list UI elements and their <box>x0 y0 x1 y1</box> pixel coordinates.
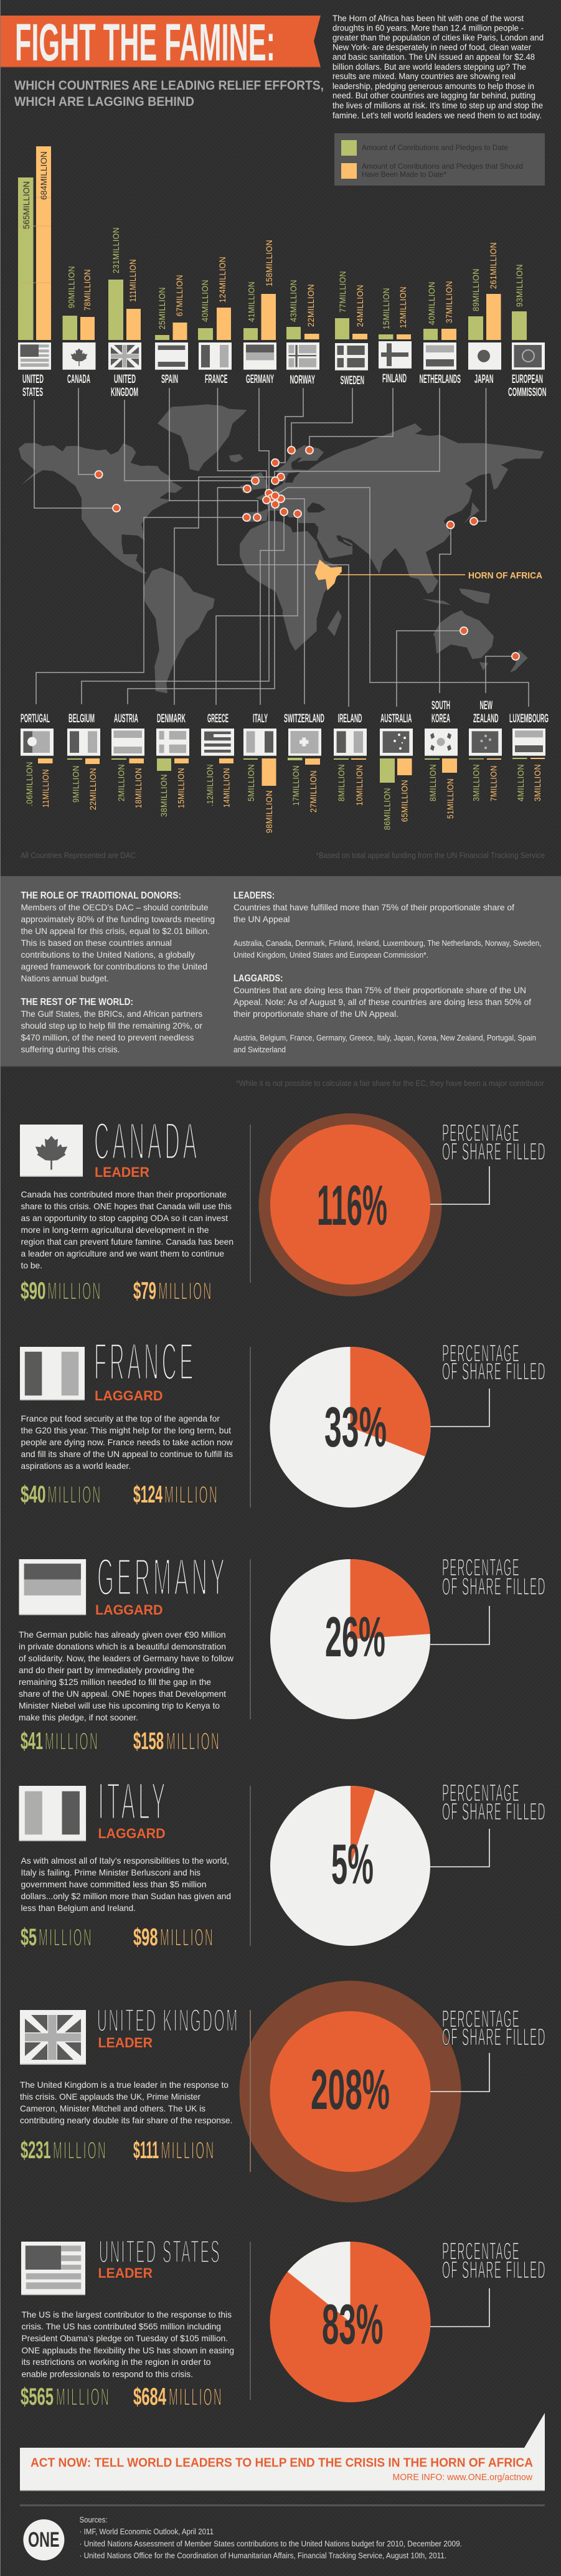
ONE logo <box>23 2519 64 2560</box>
chart: Switzerland <box>284 712 324 813</box>
chart: pie 33% <box>270 1347 431 1507</box>
intro text: The Horn of Africa has been hit with one of the worst <box>332 14 524 23</box>
chart: Greece: 14MILLION <box>222 768 232 808</box>
description: and fill its share of the UN appeal to continue to fulfill its <box>21 1449 233 1459</box>
traditional donors text: agreed framework for contributions to the United <box>21 961 207 971</box>
chart: France: 40MILLION <box>200 280 210 322</box>
callout: percentage of share filled <box>430 1554 546 1644</box>
intro text: greater than the population of cities like Paris, London and <box>332 33 544 42</box>
laggards text: and Switzerland <box>233 1045 286 1054</box>
chart: Norway <box>286 280 319 387</box>
description: share of the UN appeal. ONE hopes that Development <box>19 1689 226 1699</box>
chart: Netherlands: 37MILLION <box>445 281 454 323</box>
panel: Canada: MILLION <box>158 1278 213 1305</box>
amounts: $79 <box>133 1278 156 1305</box>
amounts: $111 <box>133 2137 159 2164</box>
description: crisis. The US has contributed $565 million including <box>21 2321 221 2331</box>
description: more in long-term agricultural development in the <box>21 1225 209 1235</box>
traditional donors text: THE ROLE OF TRADITIONAL DONORS: <box>21 890 181 901</box>
amounts: $124 <box>133 1481 163 1508</box>
chart: Austria: 18MILLION <box>134 768 143 808</box>
ONE logo: ONE <box>28 2528 60 2552</box>
chart: United Kingdom: 111MILLION <box>128 259 138 302</box>
description: Canada has contributed more than their proportionate <box>21 1189 227 1199</box>
chart: Canada: 90MILLION <box>67 266 76 308</box>
status: leader: LEADER <box>98 2035 153 2050</box>
flag: United Kingdom <box>20 2010 86 2065</box>
leaders text: Australia, Canada, Denmark, Finland, Ireland, Luxembourg, The Netherlands, Norway, Sweden, <box>233 939 542 948</box>
intro text: results are mixed. Many countries are showing real <box>332 72 516 81</box>
chart: Spain <box>155 275 188 386</box>
chart: New Zealand: 7MILLION <box>489 765 498 801</box>
panel: Germany: GERMANY <box>97 1548 228 1606</box>
chart: Norway: NORWAY <box>290 374 315 387</box>
legend swatch: contributions <box>341 140 357 156</box>
description: contributing nearly double its fair share of the response. <box>20 2115 233 2125</box>
description: people are dying now. France needs to take action now <box>21 1437 233 1447</box>
text: PORTUGAL <box>21 712 50 725</box>
intro text: New York- are desperately in need of food, clean water <box>332 42 531 52</box>
flag: France <box>20 1347 85 1400</box>
chart: Australia: 65MILLION <box>400 780 410 822</box>
rest of the world text <box>21 997 202 1054</box>
intro text: billion dollars. But are world leaders stepping up? The <box>332 62 526 72</box>
status: laggard: LAGGARD <box>95 1388 163 1404</box>
call to action speech box <box>20 2413 545 2491</box>
legend swatch: should have been made <box>341 163 357 179</box>
status: laggard: LAGGARD <box>98 1826 166 1841</box>
amounts <box>21 1278 213 1305</box>
description: enable professionals to respond to this crisis. <box>21 2369 193 2379</box>
intro text: the lives of millions at risk. It's time to step up and stop the <box>332 101 543 110</box>
description <box>21 1189 233 1270</box>
chart: Belgium: 22MILLION <box>88 768 98 810</box>
panel: France: MILLION <box>164 1482 219 1508</box>
sources: · United Nations Office for the Coordination of Humanitarian Affairs, Financial Tracking Service, August 10th, 2011. <box>80 2550 446 2560</box>
description: Italy is failing. Prime Minister Berlusconi and his <box>21 1867 200 1877</box>
chart: Luxembourg: 3MILLION <box>533 764 542 801</box>
description: share to this crisis. ONE hopes that Canada will use this <box>21 1201 232 1211</box>
chart: Sweden: 77MILLION <box>338 271 347 313</box>
chart: Greece: GREECE <box>207 712 229 725</box>
description: in private donations which is a beautiful demonstration <box>19 1641 226 1651</box>
chart: Spain: 25MILLION <box>158 287 167 329</box>
chart: circle 208%: 208% <box>311 2059 390 2121</box>
subtitle: WHICH ARE LAGGING BEHIND <box>14 95 194 109</box>
chart: Italy: ITALY <box>253 712 268 725</box>
description: The German public has already given over €90 Million <box>19 1630 226 1639</box>
chart: Germany <box>243 240 276 386</box>
connector lines from countries to map pins <box>34 388 529 707</box>
description <box>21 1856 231 1913</box>
leaders text <box>233 890 542 960</box>
panel: Germany: MILLION <box>166 1729 220 1755</box>
amounts: $90 <box>21 1278 46 1305</box>
chart: United Kingdom <box>108 227 141 399</box>
title: FIGHT THE FAMINE: <box>15 13 275 72</box>
sources <box>80 2515 462 2560</box>
chart: Luxembourg: 4MILLION <box>516 764 526 801</box>
footnote: DAC: All Countries Represented are DAC <box>21 851 136 860</box>
rest of the world text: should step up to help fill the remaining 20%, or <box>21 1021 202 1031</box>
chart: pie 83% <box>270 2242 431 2402</box>
chart: Sweden <box>335 271 368 387</box>
traditional donors text: the UN appeal for this crisis, equal to $2.01 billion. <box>21 926 210 936</box>
description: France put food security at the top of the agenda for <box>21 1413 220 1423</box>
chart: Portugal: .06MILLION <box>25 762 34 806</box>
intro text: droughts in 60 years. More than 12.4 million people - <box>332 24 524 32</box>
rest of the world text: The Gulf States, the BRICs, and African partners <box>21 1009 202 1019</box>
chart: Ireland: 8MILLION <box>337 764 346 801</box>
panel: Italy: ITALY <box>98 1772 168 1831</box>
intro text: famine. Let's tell world leaders we need them to act today. <box>332 111 542 120</box>
laggards text: LAGGARDS: <box>233 973 283 984</box>
more info link: MORE INFO: www.ONE.org/actnow <box>392 2473 533 2483</box>
chart: New Zealand: NEW <box>479 699 493 712</box>
description: dollars...only $2 million more than Sudan has given and <box>21 1891 231 1901</box>
status: leader: LEADER <box>98 2265 153 2281</box>
chart: United States: 565MILLION <box>22 181 31 229</box>
description: less than Belgium and Ireland. <box>21 1903 136 1913</box>
description: a leader on agriculture and we want them to continue <box>21 1248 224 1258</box>
amounts: $40 <box>21 1481 46 1508</box>
leaders text: LEADERS: <box>233 890 275 901</box>
description: to be. <box>21 1260 42 1270</box>
callout: percentage of share filled <box>430 1340 546 1427</box>
chart: Switzerland: 17MILLION <box>291 765 301 806</box>
callout: percentage of share filled <box>430 1120 546 1204</box>
rest of the world text: $470 million, of the need to prevent needless <box>21 1032 194 1042</box>
amounts <box>21 2137 215 2164</box>
chart: Portugal <box>21 712 54 808</box>
chart: European Commission <box>508 264 547 399</box>
chart: United States: STATES <box>22 386 43 399</box>
chart: United States: UNITED <box>22 373 44 386</box>
amounts: $98 <box>133 1924 158 1951</box>
description: President Obama’s pledge on Tuesday of $105 million. <box>21 2333 228 2343</box>
traditional donors text: Members of the OECD’s DAC – should contribute <box>21 902 209 912</box>
chart: Finland: 15MILLION <box>382 288 391 329</box>
chart: Spain: 67MILLION <box>175 275 184 316</box>
chart: Denmark <box>156 712 189 817</box>
status: laggard: LAGGARD <box>95 1602 163 1618</box>
chart: New Zealand <box>469 699 502 801</box>
chart: Sweden: 24MILLION <box>356 285 365 327</box>
chart: New Zealand: 3MILLION <box>472 764 481 801</box>
subtitle <box>14 78 324 109</box>
subtitle: WHICH COUNTRIES ARE LEADING RELIEF EFFORTS, <box>14 78 324 93</box>
panel: United Kingdom: MILLION <box>161 2137 215 2164</box>
chart: Japan: 261MILLION <box>489 242 498 289</box>
inland seas on the map <box>280 458 353 554</box>
status: leader: LEADER <box>95 1164 149 1180</box>
chart: Australia <box>380 712 413 830</box>
description: The United Kingdom is a true leader in the response to <box>20 2080 229 2090</box>
horn of africa highlight <box>315 560 542 590</box>
laggards text: Countries that are doing less than 75% of their proportionate share of the UN <box>233 985 526 995</box>
chart: European Commission: 93MILLION <box>515 264 524 307</box>
description <box>21 2309 234 2379</box>
legend labels: Have Been Made to Date* <box>362 170 446 179</box>
rest of the world text: suffering during this crisis. <box>21 1044 120 1054</box>
amounts: MILLION <box>45 1729 99 1755</box>
amounts: $158 <box>133 1728 164 1755</box>
intro text <box>332 14 544 120</box>
chart: Denmark: 15MILLION <box>177 768 186 808</box>
chart: Norway: 22MILLION <box>306 284 316 327</box>
description: ONE applauds the flexibility the US has shown in easing <box>21 2345 234 2355</box>
chart: Finland <box>379 286 412 385</box>
chart: circle 116% <box>259 1113 442 1296</box>
chart: South Korea: 51MILLION <box>446 778 455 819</box>
description <box>20 2080 233 2125</box>
chart: United Kingdom: KINGDOM <box>111 386 138 399</box>
traditional donors text: Nations annual budget. <box>21 973 109 983</box>
laggards text: Austria, Belgium, France, Germany, Greece, Italy, Japan, Korea, New Zealand, Portugal, Spain <box>233 1034 536 1042</box>
sources: · United Nations Assessment of Member States contributions to the United Nations budget for 2010, December 2009. <box>80 2539 462 2548</box>
chart: South Korea <box>425 699 458 819</box>
chart: Netherlands <box>420 281 461 386</box>
amounts <box>21 1481 219 1508</box>
map pins <box>95 446 519 660</box>
chart: Austria: 2MILLION <box>117 764 126 801</box>
chart: Ireland <box>334 712 367 806</box>
panel: United Kingdom <box>20 1981 546 2202</box>
description: make this pledge, if not sooner. <box>19 1712 138 1722</box>
chart: Greece <box>201 712 234 808</box>
chart: Germany: 41MILLION <box>247 281 257 322</box>
callout: percentage of share filled <box>430 1780 546 1867</box>
amounts <box>21 1924 214 1951</box>
flag: Canada <box>20 1125 83 1177</box>
flag: United States <box>21 2242 85 2295</box>
panel: Canada: CANADA <box>94 1112 200 1171</box>
panel: Italy: MILLION <box>160 1924 214 1951</box>
description <box>21 1413 233 1471</box>
description: The US is the largest contributor to the response to this <box>21 2309 232 2319</box>
chart: Finland: FINLAND <box>382 372 407 385</box>
sources: Sources: <box>80 2515 107 2524</box>
legend labels <box>362 143 523 179</box>
description: as an opportunity to stop capping ODA so it can invest <box>21 1213 228 1223</box>
chart: Italy <box>243 712 276 833</box>
panel: France: FRANCE <box>94 1333 196 1391</box>
chart: Belgium: BELGIUM <box>68 712 95 725</box>
description <box>19 1630 234 1722</box>
leaders text: the UN Appeal <box>233 914 290 924</box>
text: SWITZERLAND <box>284 712 324 725</box>
amounts: $41 <box>21 1728 43 1755</box>
chart: Germany: GERMANY <box>246 373 274 386</box>
description: government have committed less than $5 million <box>21 1879 207 1889</box>
chart: Finland: 12MILLION <box>398 286 408 328</box>
flag: Italy <box>19 1786 86 1841</box>
laggards text <box>233 973 536 1054</box>
panel: Germany <box>19 1548 546 1755</box>
panel: donors, leaders and laggards <box>1 876 561 1067</box>
chart: Japan: JAPAN <box>474 373 493 386</box>
chart: Ireland: IRELAND <box>337 712 362 725</box>
description: Minister Niebel will use his upcoming trip to Kenya to <box>19 1701 220 1710</box>
chart: Canada <box>62 266 96 386</box>
description: this crisis. ONE applauds the UK, Prime Minister <box>20 2092 200 2102</box>
amounts: $565 <box>21 2384 54 2410</box>
legend labels: Amount of Conributions and Pledges to Date <box>362 143 508 152</box>
traditional donors text <box>21 890 215 983</box>
callout: percentage of share filled <box>430 2006 546 2092</box>
amounts: $5 <box>21 1924 37 1951</box>
panel: Italy <box>19 1772 546 1951</box>
laggards text: Appeal. Note: As of August 9, all of these countries are doing less than 50% of <box>233 997 531 1007</box>
chart: Portugal: 11MILLION <box>41 769 50 808</box>
chart: United Kingdom: 231MILLION <box>111 227 121 273</box>
amounts: MILLION <box>47 1278 102 1305</box>
chart: pie 33%: 33% <box>324 1396 387 1459</box>
description: the G20 this year. This might help for the long term, but <box>21 1425 231 1435</box>
panel: United Kingdom: UNITED KINGDOM <box>97 2003 239 2038</box>
leaders text: United Kingdom, United States and European Commission*. <box>233 951 428 960</box>
chart: Italy: 98MILLION <box>265 790 274 833</box>
chart: France: 124MILLION <box>218 257 227 303</box>
chart: Belgium <box>67 712 100 810</box>
chart: Canada: 78MILLION <box>83 269 92 311</box>
chart: Spain: SPAIN <box>161 373 178 386</box>
description: aspirations as a world leader. <box>21 1461 131 1471</box>
amounts: $231 <box>21 2137 51 2164</box>
chart: South Korea: KOREA <box>431 712 450 725</box>
panel: United States <box>21 2234 546 2411</box>
laggards text: their proportionate share of the UN Appeal. <box>233 1009 398 1019</box>
chart: pie 83%: 83% <box>322 2293 384 2356</box>
description: of solidarity. Now, the leaders of Germany have to follow <box>19 1653 234 1663</box>
amounts: MILLION <box>56 2384 110 2411</box>
description: Cameron, Minister Mitchell and others. The UK is <box>20 2103 205 2113</box>
call to action headline: ACT NOW: TELL WORLD LEADERS TO HELP END THE CRISIS IN THE HORN OF AFRICA <box>31 2456 533 2470</box>
chart: Denmark: 38MILLION <box>159 774 169 817</box>
sources: · IMF, World Economic Outlook, April 2011 <box>80 2527 214 2536</box>
amounts: $684 <box>133 2384 166 2410</box>
chart: Switzerland: 27MILLION <box>309 770 318 813</box>
chart: circle 208% <box>239 1981 461 2202</box>
leaders text: Countries that have fulfilled more than 75% of their proportionate share of <box>233 902 514 912</box>
amounts <box>21 1728 220 1755</box>
callout: percentage of share filled <box>430 2238 546 2326</box>
description: As with almost all of Italy’s responsibilities to the world, <box>21 1856 229 1866</box>
chart: United States: 684MILLION <box>39 151 49 200</box>
legend labels: Amount of Conributions and Pledges that Should <box>362 162 523 171</box>
chart: Canada: CANADA <box>67 373 90 386</box>
panel: Canada <box>20 1112 546 1305</box>
panel: United States: UNITED STATES <box>99 2234 221 2269</box>
traditional donors text: This is based on these countries annual <box>21 938 172 948</box>
description: its restrictions on working in the region in order to <box>21 2357 211 2367</box>
text: NETHERLANDS <box>420 373 461 386</box>
chart: Japan <box>468 242 501 386</box>
intro text: leadership, pledging generous amounts to help those in <box>332 82 534 91</box>
description: and do their part by immediately providing the <box>19 1665 194 1675</box>
intro text: and basic sanitation. The UN issued an appeal for $2.48 <box>332 52 535 62</box>
chart: New Zealand: ZEALAND <box>473 712 498 725</box>
amounts: MILLION <box>39 1924 93 1951</box>
title banner <box>1 13 321 72</box>
panel: United States: MILLION <box>169 2384 223 2411</box>
traditional donors text: contributions to the United Nations, a globally <box>21 950 195 960</box>
world map <box>19 404 544 693</box>
chart: Ireland: 10MILLION <box>355 765 364 806</box>
chart: Norway: 43MILLION <box>289 280 298 322</box>
description: remaining $125 million needed to fill the gap in the <box>19 1677 211 1687</box>
chart: Germany: 158MILLION <box>265 240 274 286</box>
chart: Sweden: SWEDEN <box>340 374 364 387</box>
panel: France <box>20 1333 546 1508</box>
chart: Denmark: DENMARK <box>157 712 186 725</box>
traditional donors text: approximately 80% of the funding towards meeting <box>21 914 215 924</box>
chart: Belgium: 9MILLION <box>71 765 81 803</box>
chart: Austria: AUSTRIA <box>114 712 138 725</box>
description: region that can prevent future famine. Canada has been <box>21 1237 233 1247</box>
chart: South Korea: SOUTH <box>431 699 450 712</box>
amounts: MILLION <box>47 1482 102 1508</box>
chart: Luxembourg <box>509 712 549 801</box>
horn of africa label: HORN OF AFRICA <box>468 570 542 581</box>
chart: France <box>198 257 232 386</box>
legend <box>334 133 545 186</box>
chart: pie 26% <box>270 1559 430 1719</box>
amounts: MILLION <box>53 2137 107 2164</box>
chart: South Korea: 8MILLION <box>428 764 438 801</box>
text: AUSTRALIA <box>380 712 412 725</box>
chart: circle 116%: 116% <box>317 1174 387 1237</box>
chart: pie 5% <box>270 1786 430 1946</box>
amounts <box>21 2384 223 2411</box>
intro text: need. But other countries are lagging far behind, putting <box>332 91 535 100</box>
chart: Italy: 5MILLION <box>247 764 256 801</box>
chart: Netherlands: 40MILLION <box>427 281 436 325</box>
chart: Austria <box>111 712 144 808</box>
chart: Australia: 86MILLION <box>382 788 392 830</box>
chart: Greece: .12MILLION <box>205 764 215 806</box>
chart: United Kingdom: UNITED <box>114 373 136 386</box>
rest of the world text: THE REST OF THE WORLD: <box>21 997 133 1007</box>
chart: United States <box>18 146 51 399</box>
chart: Japan: 89MILLION <box>471 268 481 311</box>
chart: pie 26%: 26% <box>325 1606 385 1669</box>
flag: Germany <box>19 1559 86 1615</box>
chart: France: FRANCE <box>205 373 228 386</box>
chart: pie 5%: 5% <box>331 1833 374 1896</box>
